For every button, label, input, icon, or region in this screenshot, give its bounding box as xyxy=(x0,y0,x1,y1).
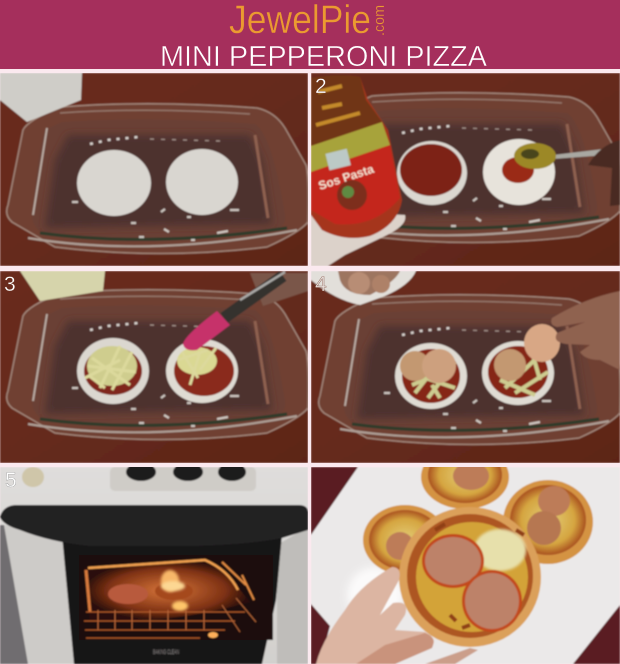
panel: step 5 oven xyxy=(0,463,308,664)
oven white sides xyxy=(4,526,69,626)
back pizza right xyxy=(503,480,593,564)
header banner xyxy=(0,0,620,73)
jar label text: Sos Pasta xyxy=(317,162,376,193)
wrapper disc with spoon xyxy=(483,139,555,205)
oven door xyxy=(62,535,282,664)
step numbers: 5 xyxy=(5,469,17,492)
oven window glow xyxy=(79,555,273,640)
pizza left with cheese xyxy=(77,338,149,404)
pizza right with pepperoni xyxy=(482,341,554,405)
front pizza xyxy=(399,507,541,647)
hand xyxy=(250,273,308,306)
icon: oven controls xyxy=(22,467,256,491)
brand logo: JewelPie.com: .com xyxy=(371,5,388,36)
pepperoni slices xyxy=(422,534,484,588)
hand right xyxy=(588,140,620,206)
icon: plastic container xyxy=(0,73,82,122)
glass dish xyxy=(7,290,308,440)
step numbers: 4 xyxy=(315,273,327,296)
icon: pink tongs xyxy=(183,272,285,350)
step numbers: 3 xyxy=(4,273,16,296)
pepperoni slice held xyxy=(524,324,560,362)
pizza left with pepperoni xyxy=(395,343,467,409)
back pizza top xyxy=(420,467,510,510)
hand xyxy=(551,291,620,370)
hand holding jar xyxy=(311,210,405,266)
glass dish xyxy=(7,104,308,253)
hand holding pizza xyxy=(316,567,478,664)
oven brand text: BAKING CLEAN xyxy=(153,650,179,656)
panel: step 1 empty dish with wrappers xyxy=(0,73,308,266)
panel: step 3 adding cheese xyxy=(0,271,308,463)
baking pizzas xyxy=(108,584,148,604)
oven racks xyxy=(84,612,245,638)
wrapper disc right xyxy=(166,149,238,215)
panel: step 4 adding pepperoni xyxy=(311,271,620,463)
pizza right with cheese xyxy=(166,339,238,403)
icon: cheese container xyxy=(20,271,105,301)
dark table corners xyxy=(311,467,620,664)
glass dish xyxy=(319,295,620,444)
icon: sauce jar xyxy=(311,75,402,238)
wrapper disc left xyxy=(77,150,151,216)
title: MINI PEPPERONI PIZZA xyxy=(160,41,488,73)
glass dish xyxy=(366,90,620,244)
icon: pepperoni bowl xyxy=(311,271,416,305)
step numbers xyxy=(4,75,327,492)
panel: step 6 finished pizzas xyxy=(311,467,620,664)
panel: step 2 adding sauce xyxy=(311,73,620,266)
icon: spoon xyxy=(514,143,620,169)
step numbers: 2 xyxy=(315,75,327,98)
wrapper disc with sauce xyxy=(397,141,467,205)
back pizza left xyxy=(363,505,447,575)
oven handle xyxy=(0,505,308,546)
